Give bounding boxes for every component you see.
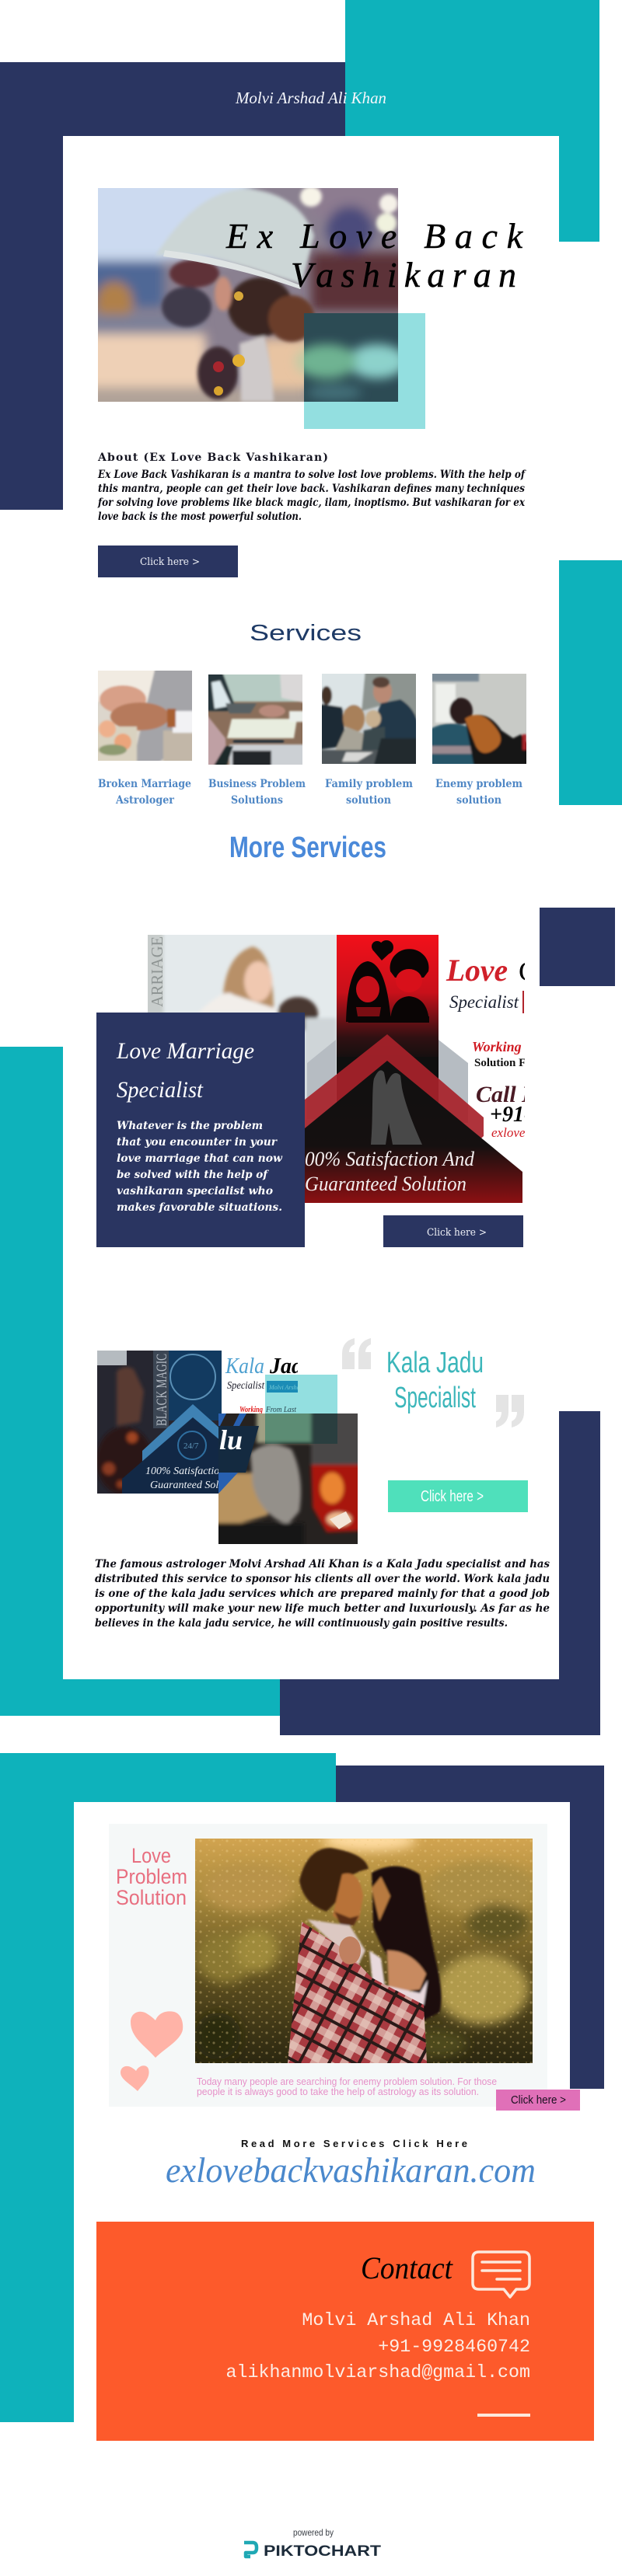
card heading: Love xyxy=(131,1844,171,1867)
navy text card: love marriage specialist xyxy=(96,1013,305,1247)
flyer satisfaction text xyxy=(305,1151,474,1190)
flyer satisfaction text: Guaranteed Solution xyxy=(305,1173,466,1195)
flyer cartoon couple icon xyxy=(346,940,429,1023)
kala jadu heading: Kala Jadu xyxy=(386,1347,484,1379)
service labels: Family problem xyxy=(325,778,413,790)
service photo: wedding hands xyxy=(98,671,192,761)
panel: left teal backdrop xyxy=(0,1047,280,1716)
card body text: that you encounter in your xyxy=(117,1136,278,1149)
service labels: Astrologer xyxy=(115,794,175,807)
panel: lower navy backdrop xyxy=(336,1766,604,2089)
title: Ex Love Back xyxy=(225,216,524,256)
kala jadu flyer: heading fragment: From Last xyxy=(265,1405,297,1414)
panel: main white card xyxy=(63,136,559,1679)
"ARRIAGE" vertical flyer text: ARRIAGE xyxy=(148,936,166,1007)
contact details: alikhanmolviarshad@gmail.com xyxy=(226,2362,530,2383)
card heading: Solution xyxy=(116,1886,187,1909)
icon: small heart xyxy=(121,2065,149,2091)
service labels: Business Problem xyxy=(208,778,306,790)
button: click here marriage xyxy=(383,1215,523,1247)
navy square accent xyxy=(540,908,615,986)
flyer red roof xyxy=(305,1034,484,1138)
flyer right text column: +91-99 xyxy=(490,1103,553,1127)
about body text xyxy=(97,469,526,523)
about heading: About (Ex Love Back Vashikaran) xyxy=(97,451,328,464)
service photo: business desk xyxy=(208,675,302,765)
title xyxy=(225,216,524,295)
kala jadu body text: is one of the kala jadu services which are prepared mainly for that a good job xyxy=(95,1588,550,1600)
flyer grey shapes xyxy=(307,1040,468,1104)
contact panel xyxy=(96,2222,594,2441)
kala jadu flyer: heading fragment xyxy=(225,1358,298,1413)
button: click here kala jadu: Click here > xyxy=(421,1488,484,1505)
contact details: +91-9928460742 xyxy=(378,2337,530,2357)
flyer right text column: C xyxy=(519,956,537,987)
plaid blanket xyxy=(288,1922,427,2063)
kala jadu body text: opportunity will make your new life much better and luxuriously. As far as he xyxy=(95,1602,550,1615)
button: click here: Click here > xyxy=(140,556,200,568)
kala jadu flyer: black magic: 100% Satisfaction xyxy=(145,1466,225,1477)
flyer silhouette couple xyxy=(371,1070,422,1145)
icon: message bubble xyxy=(473,2252,529,2297)
about body text: love back is the most powerful solution. xyxy=(98,511,302,523)
mandala icon xyxy=(170,1354,215,1400)
flyer right text column: Solution For xyxy=(474,1057,537,1069)
small pink text: people it is always good to take the help of astrology as its solution. xyxy=(197,2086,479,2097)
header author name: Molvi Arshad Ali Khan xyxy=(235,89,386,107)
fire elephant picture: lu xyxy=(219,1424,243,1455)
service labels: Enemy problem xyxy=(435,778,522,790)
small pink text xyxy=(197,2076,497,2097)
kala jadu body text: believes in the kala jadu service, he will continuously gain positive results. xyxy=(95,1617,508,1630)
kala jadu flyer: heading fragment: Molvi Arshad xyxy=(268,1384,304,1391)
card body text: vashikaran specialist who xyxy=(117,1185,273,1197)
button: click here pink xyxy=(496,2090,580,2111)
flyer red column xyxy=(337,935,439,1063)
card body text: love marriage that can now xyxy=(117,1152,283,1165)
hero photo: couple under umbrella xyxy=(98,188,398,402)
icon: big heart xyxy=(131,2011,183,2058)
card body text: makes favorable situations. xyxy=(117,1201,282,1214)
website link: exlovebackvashikaran.com xyxy=(166,2150,536,2190)
flyer right text column xyxy=(446,960,525,1137)
service labels: solution xyxy=(346,794,391,807)
read more label: Read More Services Click Here xyxy=(241,2138,467,2149)
quote mark close xyxy=(496,1395,524,1427)
button: click here kala jadu xyxy=(388,1480,528,1512)
kala jadu flyer: black magic: Guaranteed Solution xyxy=(150,1480,241,1491)
kala jadu flyer: black magic xyxy=(97,1351,222,1494)
flyer photo: smiling woman xyxy=(148,935,337,1100)
flyer right text column: Working F xyxy=(472,1039,534,1054)
footer: powered by piktochart: powered by xyxy=(293,2527,334,2538)
card heading: Problem xyxy=(116,1865,187,1888)
button: click here pink: Click here > xyxy=(511,2093,566,2107)
love marriage flyer xyxy=(148,935,525,1203)
kala jadu body text: The famous astrologer Molvi Arshad Ali Khan is a Kala Jadu specialist and has xyxy=(95,1558,550,1570)
card body text: Whatever is the problem xyxy=(117,1120,263,1132)
flyer right text column: Call Now xyxy=(476,1082,567,1107)
service photo: family reading xyxy=(322,674,416,764)
flyer satisfaction text: 00% Satisfaction And xyxy=(305,1148,475,1170)
footer: powered by piktochart: PIKTOCHART xyxy=(264,2543,381,2560)
translucent teal square collage xyxy=(265,1375,337,1444)
contact heading: Contact xyxy=(361,2250,453,2285)
service photo: couple from behind xyxy=(432,674,526,764)
contact details: Molvi Arshad Ali Khan xyxy=(302,2310,530,2330)
kala jadu body text: distributed this service to sponsor his clients all over the world. Work kala jadu xyxy=(95,1573,550,1585)
fire elephant picture xyxy=(218,1413,358,1544)
24/7 badge: 24/7 xyxy=(183,1441,199,1451)
more services heading: More Services xyxy=(229,831,386,864)
love problem card xyxy=(109,1824,547,2107)
kala jadu flyer: heading fragment: Specialist xyxy=(227,1380,265,1392)
panel: top navy backdrop xyxy=(0,62,345,510)
service labels xyxy=(98,778,522,807)
flyer right text column: Specialist xyxy=(449,992,519,1012)
kala jadu flyer: heading fragment: Kala xyxy=(225,1354,264,1379)
flyer right text column: exlovebackvashikaran xyxy=(491,1125,609,1140)
button: click here xyxy=(98,546,238,577)
title: Vashikaran xyxy=(291,255,516,295)
"BLACK MAGIC" vertical text: BLACK MAGIC xyxy=(154,1354,170,1426)
kala jadu flyer: heading fragment: Working xyxy=(239,1405,263,1414)
card body text: be solved with the help of xyxy=(117,1169,270,1181)
card body text xyxy=(117,1120,283,1214)
card heading xyxy=(116,1844,187,1909)
kala jadu heading xyxy=(386,1347,484,1414)
quote mark open xyxy=(342,1338,371,1369)
button: click here marriage: Click here > xyxy=(427,1227,487,1239)
contact details xyxy=(226,2310,530,2383)
panel: right teal side block xyxy=(559,560,622,805)
service labels: Solutions xyxy=(231,794,283,807)
fire picture navy banner with text xyxy=(218,1426,259,1473)
about body text: this mantra, people can get their love back. Vashikaran defines many techniques xyxy=(98,483,525,495)
icon: piktochart logo xyxy=(244,2543,257,2557)
card heading xyxy=(116,1038,254,1103)
translucent teal square xyxy=(304,313,425,429)
panel: right navy backdrop xyxy=(280,1411,600,1735)
card heading: Specialist xyxy=(117,1077,204,1103)
panel: lower teal backdrop xyxy=(0,1753,336,2422)
panel: top teal backdrop xyxy=(345,0,599,242)
footer: powered by piktochart xyxy=(244,2527,381,2560)
kala jadu heading: Specialist xyxy=(394,1382,476,1414)
about body text: Ex Love Back Vashikaran is a mantra to solve lost love problems. With the help of xyxy=(97,469,526,481)
couple photo in field xyxy=(194,1829,536,2063)
service labels: solution xyxy=(456,794,501,807)
kala jadu flyer: heading fragment: Jadu xyxy=(269,1354,315,1379)
card heading: Love Marriage xyxy=(116,1038,254,1064)
flyer dark roof xyxy=(305,1061,522,1203)
flyer right text column: Love xyxy=(446,953,508,988)
about body text: for solving love problems like black magic, ilam, inoptismo. But vashikaran for ex xyxy=(97,497,526,509)
service labels: Broken Marriage xyxy=(98,778,191,790)
services heading: Services xyxy=(250,621,362,646)
kala jadu body text xyxy=(95,1558,550,1630)
small pink text: Today many people are searching for enemy problem solution. For those xyxy=(197,2076,497,2087)
24/7 badge xyxy=(178,1431,206,1459)
